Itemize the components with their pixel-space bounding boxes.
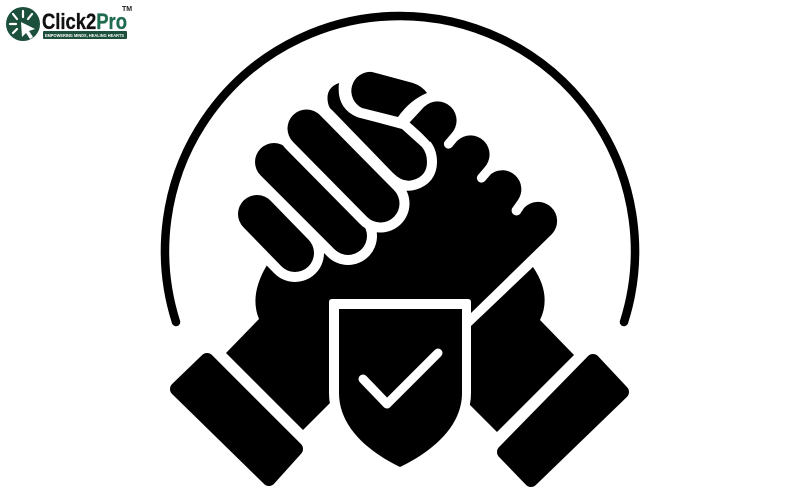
thumb — [351, 72, 427, 117]
shield — [339, 309, 462, 467]
upper hand and left forearm — [226, 101, 557, 430]
arc around hands — [165, 16, 635, 322]
finger 3 band — [274, 162, 348, 236]
right forearm — [469, 267, 574, 432]
left wrist cuff — [177, 360, 296, 479]
logo trademark: TM — [122, 6, 132, 13]
logo: Click2Pro — [6, 6, 132, 41]
check mark — [363, 353, 438, 404]
finger 3 — [274, 162, 348, 236]
finger 2 band — [306, 128, 380, 204]
logo tagline bar: EMPOWERING MINDS, HEALING HEARTS — [45, 33, 124, 38]
finger 2 — [306, 128, 380, 204]
finger 4 — [257, 214, 295, 253]
finger 1 crescent — [327, 83, 427, 181]
right wrist cuff — [504, 361, 622, 480]
finger 4 band — [257, 214, 295, 253]
logo icon: cursor in green circle — [6, 7, 40, 41]
logo wordmark: Click2Pro — [42, 9, 127, 34]
icon: handshake with shield — [165, 16, 635, 480]
re-drawn back knuckle beside thumb — [411, 105, 451, 142]
shield outline — [329, 299, 471, 478]
